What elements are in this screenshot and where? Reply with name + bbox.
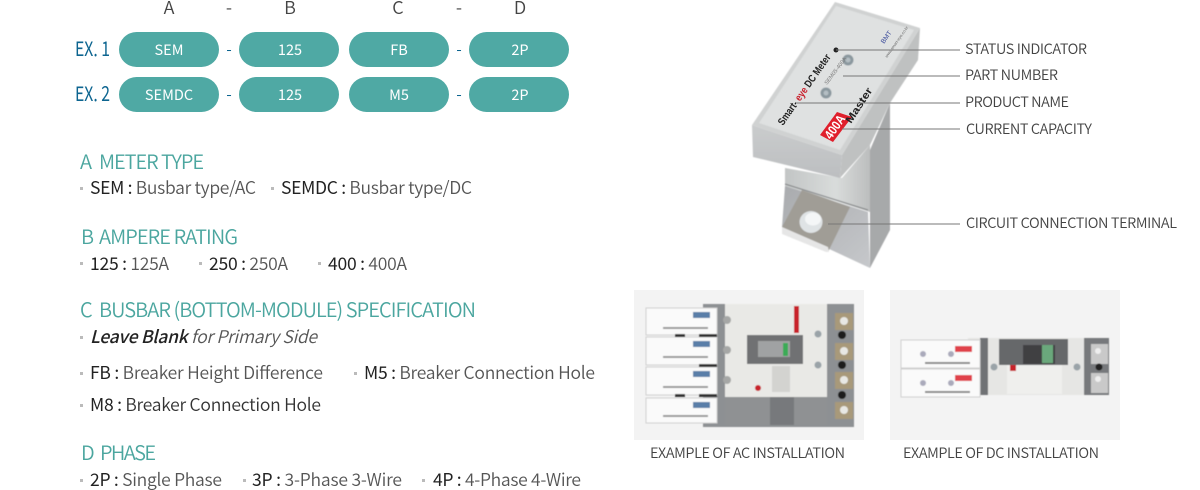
section B: ampere rating: 250 : 250A xyxy=(209,251,288,276)
section C: busbar specification: M8 : Breaker Connection Hole xyxy=(90,392,321,417)
section B: ampere rating xyxy=(80,221,407,276)
example 2 row: M5 xyxy=(389,84,409,105)
terminals xyxy=(835,313,853,330)
photo: AC installation xyxy=(634,290,864,440)
section C: busbar specification: Leave Blank for Primary Side xyxy=(90,324,318,349)
section C: busbar specification: BUSBAR (BOTTOM-MODULE) SPECIFICATION xyxy=(99,294,476,323)
section A: meter type: SEMDC : Busbar type/DC xyxy=(281,175,472,200)
product labels printed on meter: 400A xyxy=(821,111,849,142)
right rear face of lower body xyxy=(870,103,890,268)
section D: phase xyxy=(80,437,581,490)
section C: busbar specification: M5 : Breaker Connection Hole xyxy=(364,360,595,385)
meters xyxy=(901,340,980,368)
section A: meter type: SEM : Busbar type/AC xyxy=(90,175,256,200)
section A: meter type xyxy=(80,146,472,200)
section B: ampere rating: AMPERE RATING xyxy=(99,221,238,250)
screws xyxy=(842,54,854,66)
example 2 row: 125 xyxy=(278,84,302,105)
photo: DC installation xyxy=(890,290,1120,440)
section B: ampere rating: B xyxy=(81,221,94,250)
section D: phase: PHASE xyxy=(100,437,156,466)
section C: busbar specification: C xyxy=(80,294,93,323)
capacity badge xyxy=(820,112,852,142)
section B: ampere rating: 400 : 400A xyxy=(328,251,407,276)
callout labels: CURRENT CAPACITY xyxy=(966,118,1092,139)
example 2 row: 2P xyxy=(511,84,529,105)
section C: busbar specification xyxy=(80,294,595,417)
product labels printed on meter: www.smart-eye.co.kr xyxy=(884,25,909,59)
callout labels: STATUS INDICATOR xyxy=(965,38,1087,59)
example 1 row: EX. 1 xyxy=(75,33,110,62)
meters xyxy=(646,308,717,335)
example 1 row: FB xyxy=(390,39,408,60)
terminal plate xyxy=(782,190,850,252)
example 2 row: - xyxy=(226,81,232,105)
status LED xyxy=(834,48,838,52)
example 1 row: SEM xyxy=(155,39,183,60)
product name printed: Smart- eye DC Meter xyxy=(776,52,834,128)
callout lines xyxy=(797,50,960,224)
example 2 row xyxy=(75,77,569,112)
callout labels: CIRCUIT CONNECTION TERMINAL xyxy=(966,212,1177,233)
section A: meter type: A xyxy=(80,146,92,175)
brand: BMT xyxy=(880,30,894,45)
section C: busbar specification: FB : Breaker Height Difference xyxy=(90,360,323,385)
caption: AC installation: EXAMPLE OF AC INSTALLATION xyxy=(650,442,845,463)
part number print: SEM05-400A xyxy=(824,56,848,86)
section B: ampere rating: 125 : 125A xyxy=(90,251,169,276)
section A: meter type: METER TYPE xyxy=(99,146,204,175)
example 1 row: - xyxy=(456,36,462,60)
housing sides xyxy=(752,125,842,178)
product photo: meter module xyxy=(752,2,920,268)
example 2 row: - xyxy=(456,81,462,105)
top face xyxy=(752,2,920,155)
callout labels: PRODUCT NAME xyxy=(965,91,1069,112)
section D: phase: D xyxy=(81,437,95,466)
product labels printed on meter: Master xyxy=(843,86,875,126)
callout labels: PART NUMBER xyxy=(965,64,1058,85)
example 1 row: - xyxy=(226,36,232,60)
example 1 row xyxy=(75,32,569,67)
example 2 row: EX. 2 xyxy=(75,78,110,107)
callout labels xyxy=(965,38,1177,233)
product labels printed on meter xyxy=(776,25,909,142)
metal lower housing xyxy=(782,186,870,268)
upper translucent block xyxy=(785,145,870,212)
example 2 row: SEMDC xyxy=(145,84,193,105)
example 1 row: 2P xyxy=(511,39,529,60)
caption: DC installation: EXAMPLE OF DC INSTALLATION xyxy=(903,442,1099,463)
column headers xyxy=(164,0,526,20)
example 1 row: 125 xyxy=(278,39,302,60)
